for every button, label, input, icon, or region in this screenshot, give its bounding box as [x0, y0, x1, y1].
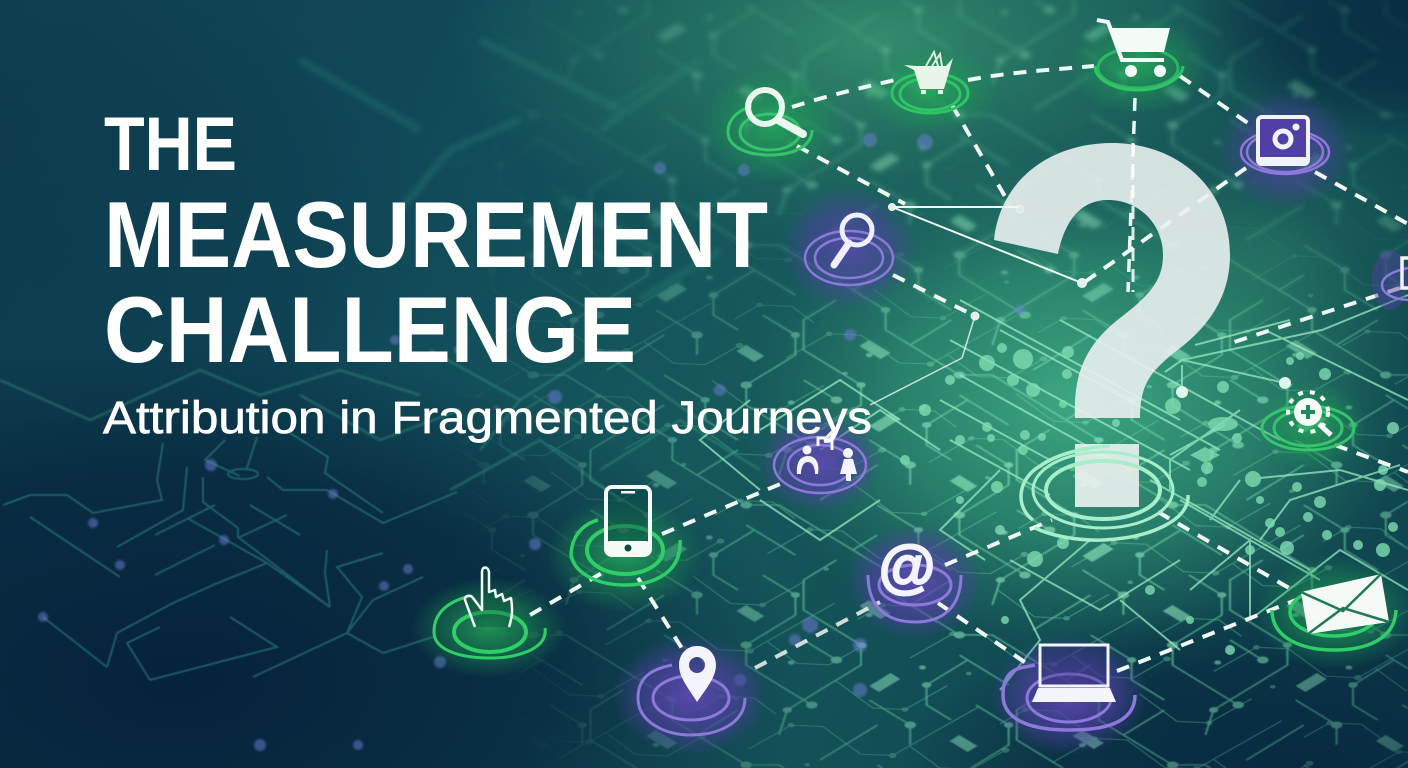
node: purple magnifier	[805, 215, 893, 285]
node: at sign	[868, 534, 961, 622]
node: large shopping cart	[1095, 20, 1183, 90]
node: people	[774, 432, 866, 493]
dashed journey connectors	[530, 66, 1408, 671]
thin link lines	[870, 204, 1086, 405]
node: laptop	[1003, 645, 1135, 730]
node: gear search	[1262, 392, 1354, 450]
node: envelope	[1272, 574, 1396, 650]
node: central target rings	[1021, 446, 1188, 540]
node: search green	[728, 90, 812, 155]
title line: MEASUREMENT: MEASUREMENT	[104, 182, 768, 287]
node: right edge device	[1372, 250, 1408, 310]
node: location pin	[638, 646, 745, 735]
upper-left faint traces	[300, 40, 720, 300]
question mark	[994, 143, 1230, 507]
central bright traces	[700, 295, 1408, 690]
title line: THE: THE	[104, 102, 237, 187]
node glows	[411, 15, 1408, 755]
node: tablet	[1241, 117, 1329, 174]
node: at sign: @	[879, 534, 935, 599]
subtitle: Attribution in Fragmented Journeys	[103, 392, 872, 443]
node: small shopping cart	[892, 52, 968, 113]
lower-left traces	[3, 433, 457, 680]
title line: CHALLENGE: CHALLENGE	[104, 277, 636, 382]
node: hand pointer	[434, 568, 545, 658]
node: smartphone	[571, 487, 680, 585]
